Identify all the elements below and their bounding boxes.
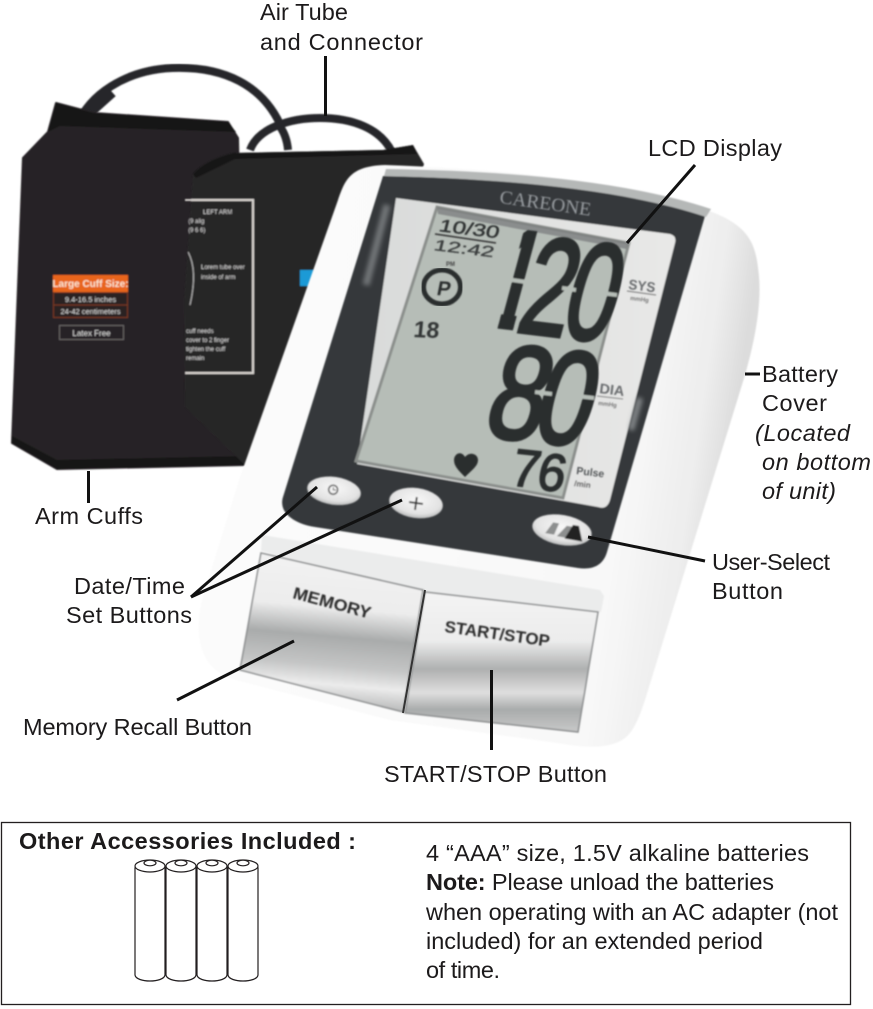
label: battery cover: (Located [755, 420, 851, 446]
LCD reading: diastolic [473, 316, 616, 475]
cuff instruction text: (9 6 6) [188, 228, 205, 234]
label: LCD display [627, 135, 782, 243]
LCD reading: systolic [496, 229, 624, 344]
cuff instruction text: cover to 2 finger [186, 338, 229, 344]
label: memory recall button [23, 641, 294, 740]
LCD date and time: 10/30 [437, 215, 502, 242]
label: arm cuffs: Arm Cuffs [35, 503, 143, 529]
label: battery cover: Battery [762, 361, 838, 387]
LCD reading: systolic: 2 [506, 209, 597, 367]
plus button [387, 484, 445, 522]
memory button [240, 553, 423, 712]
battery note [425, 840, 838, 983]
LCD screen [356, 207, 629, 498]
icon: heart [454, 453, 478, 477]
cuff instruction text: Lorem tube over [201, 265, 245, 271]
cuff instruction text: (9 alig [188, 219, 204, 225]
LCD unit labels: /min [574, 479, 591, 490]
LCD reading: systolic: 1 [469, 199, 565, 360]
LCD unit labels: SYS [628, 276, 656, 295]
label: air tube and connector [260, 0, 423, 116]
LCD unit labels: Pulse [576, 465, 605, 480]
icon: pressure indicator: P [435, 278, 453, 301]
label: battery cover [745, 361, 871, 504]
LCD unit labels: mmHg [598, 401, 617, 409]
label: user-select button: Button [712, 578, 783, 604]
cuff size label: Latex Free [72, 329, 111, 338]
LCD reading: systolic: 0 [550, 214, 641, 372]
heading: Other Accessories Included : [19, 828, 356, 854]
label: battery cover: of unit) [762, 478, 836, 504]
start stop button: START/STOP [443, 617, 551, 651]
LCD date and time: 12:42 [432, 237, 496, 261]
arm cuff: large [12, 103, 245, 469]
LCD date and time [432, 215, 502, 268]
silver screen frame [357, 198, 675, 508]
cuff instruction text: LEFT ARM [203, 210, 232, 216]
cuff instruction text [186, 210, 245, 362]
cuff size label [52, 275, 129, 340]
LCD reading: pulse: 7 [507, 437, 546, 499]
user select button [530, 510, 594, 550]
monitor body [198, 165, 760, 747]
LCD unit labels: mmHg [630, 296, 649, 304]
label: start/stop button: START/STOP Button [384, 761, 607, 787]
cuff size label: Large Cuff Size: [52, 279, 129, 290]
label: date/time set buttons: Date/Time [74, 573, 185, 599]
icon: user 18: 18 [413, 316, 441, 343]
battery note: Note: Please unload the batteries [426, 869, 774, 895]
cuff instruction text: cuff needs [186, 329, 214, 335]
battery note: when operating with an AC adapter (not [425, 899, 838, 925]
LCD unit labels [574, 276, 656, 490]
icon: pressure indicator [424, 270, 460, 304]
battery note: of time. [426, 957, 500, 983]
cuff instruction text: inside of arm [201, 275, 235, 281]
cuff instruction text: tighten the cuff [186, 347, 226, 353]
brand name: CAREONE [498, 187, 592, 221]
icon: four AAA batteries [135, 860, 258, 981]
LCD reading: pulse: 6 [533, 441, 572, 503]
label: air tube and connector: and Connector [260, 29, 423, 55]
label: memory recall button: Memory Recall Button [23, 714, 252, 740]
battery note: included) for an extended period [426, 928, 763, 954]
cuff instruction text: remain [186, 356, 204, 362]
top button ledge [261, 535, 604, 612]
dark face panel [282, 169, 711, 568]
cuff size label: 9.4-16.5 inches [65, 295, 116, 304]
arm cuff: standard [184, 145, 424, 465]
clock button [305, 473, 363, 508]
cuff size label: 24-42 centimeters [60, 307, 121, 316]
label: date/time set buttons: Set Buttons [66, 602, 192, 628]
label: user-select button [588, 537, 830, 604]
panel: other accessories [2, 822, 850, 1004]
air tubes [72, 68, 392, 152]
battery note: 4 “AAA” size, 1.5V alkaline batteries [426, 840, 809, 866]
label: battery cover: Cover [762, 390, 827, 416]
memory button: MEMORY [291, 584, 374, 623]
LCD unit labels: DIA [599, 380, 625, 399]
label: user-select button: User-Select [712, 549, 830, 575]
label: LCD display: LCD Display [648, 135, 782, 161]
label: battery cover: on bottom [762, 449, 871, 475]
LCD reading: pulse [507, 437, 572, 503]
start stop button [403, 590, 598, 732]
LCD date and time: PM [446, 262, 455, 268]
label: arm cuffs [35, 471, 143, 529]
label: date/time set buttons [66, 487, 402, 628]
LCD reading: diastolic: 8 [473, 316, 570, 470]
LCD reading: diastolic: 0 [521, 323, 616, 475]
